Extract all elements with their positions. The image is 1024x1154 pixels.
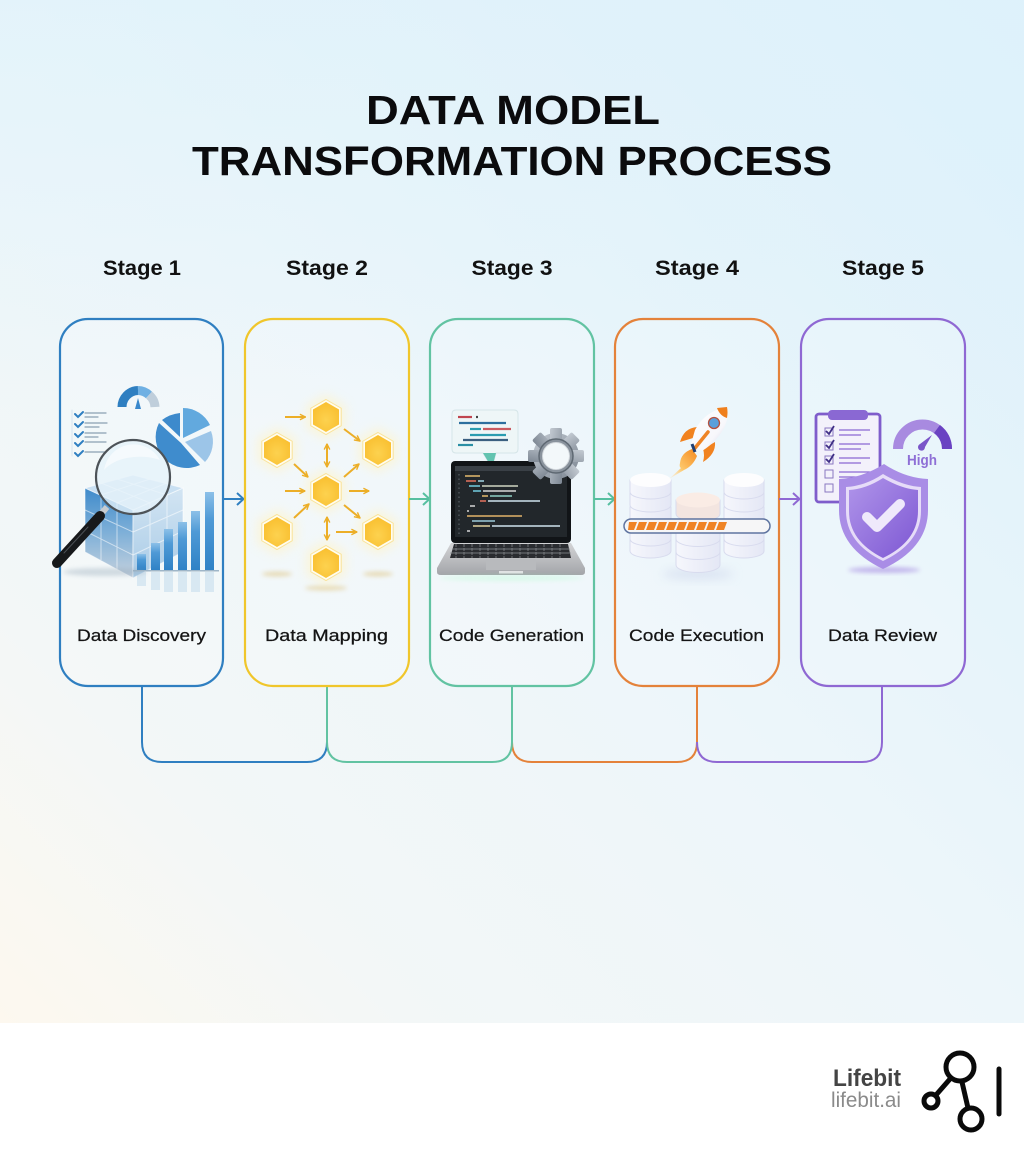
icon: pie chart bbox=[156, 408, 213, 468]
panel: stage 5 data review bbox=[801, 319, 965, 686]
stage headings: Stage 1 bbox=[103, 257, 181, 280]
icon: quality gauge bbox=[898, 424, 947, 469]
arrow: stage 3 to 4 bbox=[594, 493, 614, 505]
right stack bbox=[724, 473, 764, 558]
stage labels: Code Execution bbox=[629, 626, 764, 645]
brand url: lifebit.ai bbox=[831, 1089, 901, 1112]
arrow: stage 2 to 3 bbox=[409, 493, 430, 505]
icon: shadows bbox=[262, 572, 393, 590]
title: DATA MODEL bbox=[366, 87, 660, 133]
footer logo bbox=[831, 1053, 999, 1130]
stage labels bbox=[77, 626, 938, 645]
text: high: High bbox=[907, 452, 937, 469]
stage labels: Data Discovery bbox=[77, 626, 207, 645]
icon: magnifying glass bbox=[57, 440, 170, 576]
icon: progress bar bbox=[624, 519, 770, 533]
stage headings: Stage 2 bbox=[286, 257, 368, 280]
arrow: stage 4 to 5 bbox=[779, 493, 800, 505]
background top wash bbox=[0, 0, 1024, 420]
icon: hexagon network bbox=[257, 394, 398, 586]
title bbox=[192, 87, 832, 184]
panel: stage 3 code generation bbox=[430, 319, 594, 686]
stage labels: Data Mapping bbox=[265, 626, 388, 645]
connector lines bbox=[142, 686, 882, 762]
panel: stage 4 code execution bbox=[615, 319, 779, 686]
icon: mapping arrows bbox=[285, 417, 369, 540]
icon: lifebit network mark bbox=[924, 1053, 999, 1130]
icon: checklist bbox=[72, 410, 107, 456]
icon: gear bbox=[528, 428, 584, 484]
brand name: Lifebit bbox=[833, 1065, 901, 1092]
icon: data cube bbox=[85, 475, 183, 578]
stage labels: Data Review bbox=[828, 626, 938, 645]
stage headings: Stage 4 bbox=[655, 257, 739, 280]
icon: database stacks bbox=[630, 473, 764, 580]
middle stack bbox=[676, 492, 720, 572]
icon: clipboard checklist bbox=[816, 410, 880, 502]
panel: stage 2 data mapping bbox=[245, 319, 409, 686]
icon: speech bubble with code bbox=[452, 410, 518, 468]
left stack bbox=[630, 473, 671, 558]
stage labels: Code Generation bbox=[439, 626, 584, 645]
stage headings: Stage 3 bbox=[472, 257, 552, 280]
icon: gauge bbox=[122, 390, 155, 409]
stage headings bbox=[103, 257, 924, 280]
icon: rocket bbox=[669, 407, 728, 479]
footer band bbox=[0, 1023, 1024, 1154]
icon: shield with check bbox=[839, 464, 928, 573]
panel: stage 1 data discovery bbox=[57, 319, 223, 686]
bar chart bbox=[133, 492, 219, 592]
stage headings: Stage 5 bbox=[842, 257, 924, 280]
arrow: stage 1 to 2 bbox=[223, 493, 244, 505]
title: TRANSFORMATION PROCESS bbox=[192, 138, 832, 184]
icon: laptop bbox=[437, 461, 585, 581]
